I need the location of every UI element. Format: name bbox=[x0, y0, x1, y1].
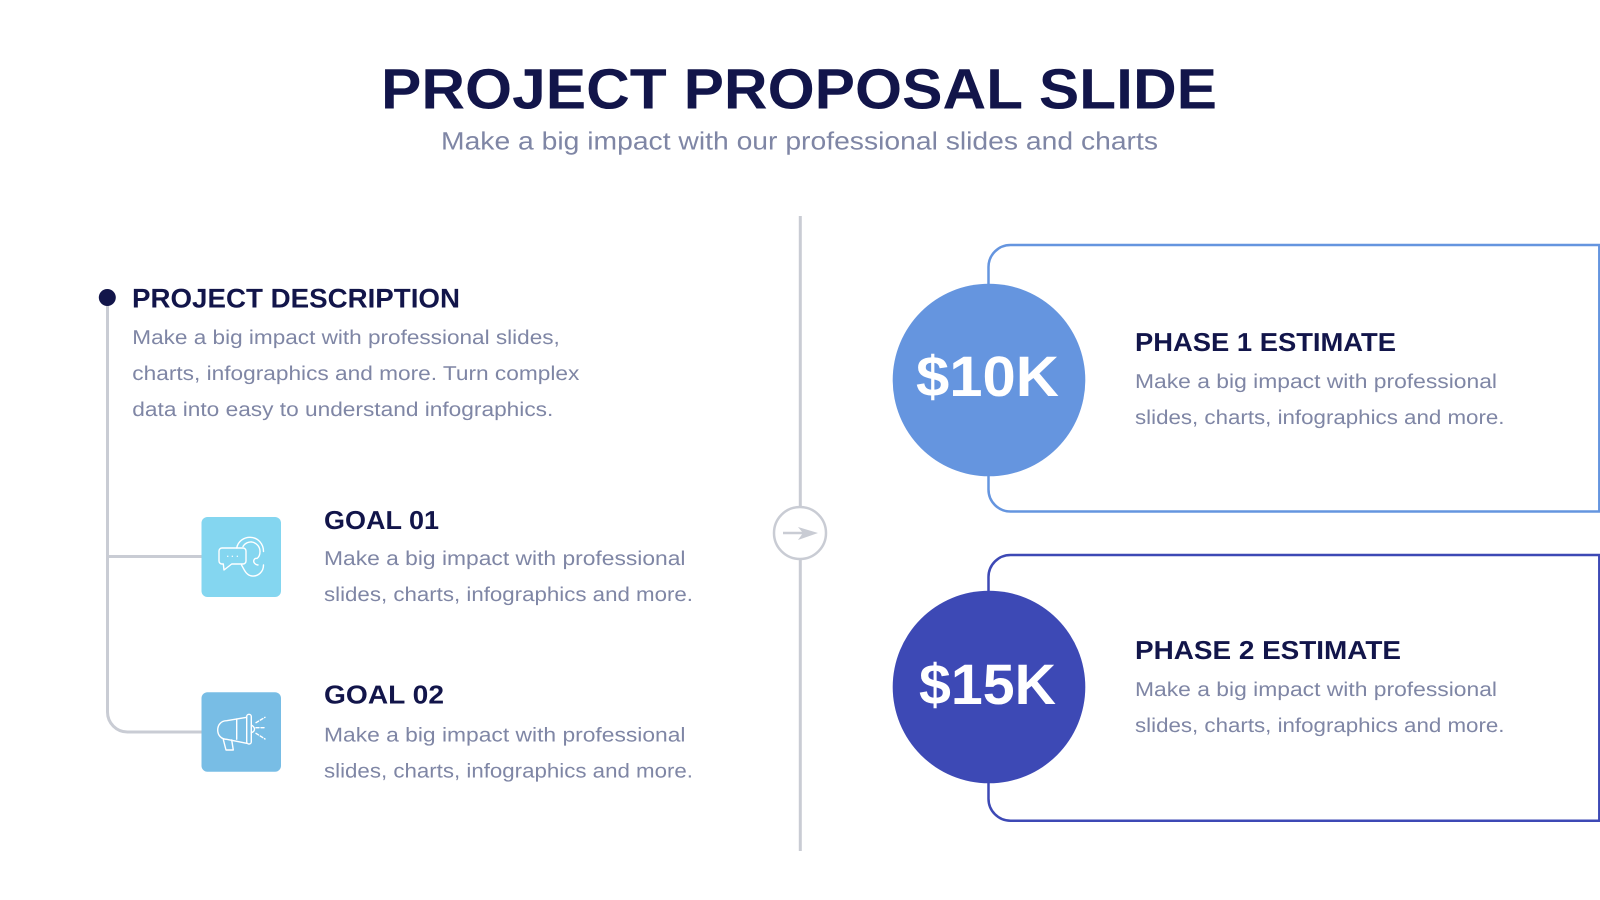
phase 1 outline bbox=[988, 245, 1600, 512]
panel: project description bbox=[132, 284, 579, 421]
phase 2 text: slides, charts, infographics and more. bbox=[1135, 715, 1504, 737]
phase 2 text bbox=[1135, 679, 1504, 737]
icon: megaphone bbox=[202, 692, 281, 772]
timeline connector bbox=[99, 289, 202, 732]
phase 2 badge: $15K bbox=[919, 653, 1056, 717]
subtitle: Make a big impact with our professional slides and charts bbox=[441, 128, 1158, 156]
panel: goal 02 bbox=[324, 680, 693, 782]
phase 2 badge bbox=[893, 591, 1085, 783]
phase 1 heading: PHASE 1 ESTIMATE bbox=[1135, 327, 1396, 357]
phase 1 badge: $10K bbox=[916, 345, 1059, 409]
phase 1 text: slides, charts, infographics and more. bbox=[1135, 407, 1504, 429]
phase 1 text bbox=[1135, 371, 1504, 429]
phase 2 text: Make a big impact with professional bbox=[1135, 679, 1497, 701]
center divider with arrow bbox=[774, 216, 826, 851]
title: PROJECT PROPOSAL SLIDE bbox=[381, 58, 1217, 122]
description text bbox=[132, 327, 579, 421]
heading: project description: PROJECT DESCRIPTION bbox=[132, 284, 460, 314]
phase 1 badge bbox=[893, 284, 1085, 476]
description text: data into easy to understand infographics. bbox=[132, 399, 553, 421]
heading: goal 01: GOAL 01 bbox=[324, 505, 439, 535]
goal 02 text: slides, charts, infographics and more. bbox=[324, 760, 693, 782]
goal 01 text bbox=[324, 548, 693, 606]
goal 01 text: Make a big impact with professional bbox=[324, 548, 686, 570]
panel: goal 01 bbox=[324, 505, 693, 606]
description text: Make a big impact with professional slides, bbox=[132, 327, 560, 349]
phase 1 text: Make a big impact with professional bbox=[1135, 371, 1497, 393]
goal 02 text bbox=[324, 724, 693, 782]
goal 02 text: Make a big impact with professional bbox=[324, 724, 686, 746]
description text: charts, infographics and more. Turn complex bbox=[132, 363, 579, 385]
panel: phase 2 bbox=[893, 555, 1600, 821]
heading: goal 02: GOAL 02 bbox=[324, 680, 444, 710]
goal 01 text: slides, charts, infographics and more. bbox=[324, 584, 693, 606]
panel: phase 1 bbox=[893, 245, 1600, 512]
icon: ear and speech bubble bbox=[202, 517, 281, 597]
phase 2 heading: PHASE 2 ESTIMATE bbox=[1135, 635, 1401, 665]
phase 2 outline bbox=[988, 555, 1600, 821]
